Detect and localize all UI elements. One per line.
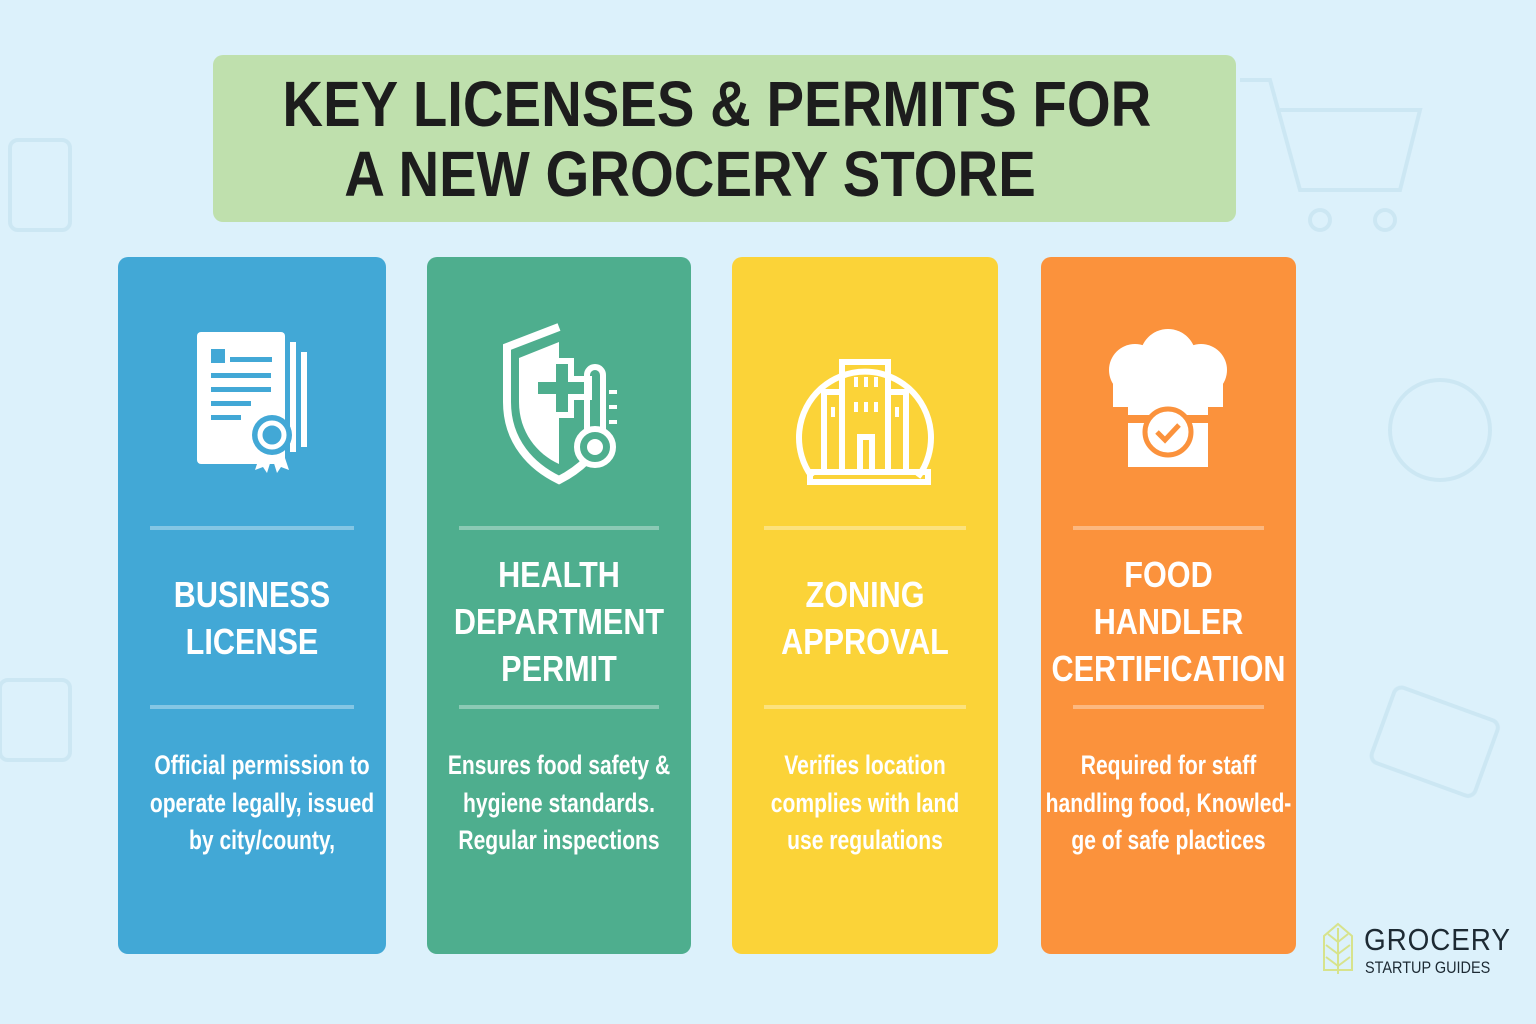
title: KEY LICENSES & PERMITS FOR bbox=[282, 68, 1151, 140]
panel: zoning approval bbox=[732, 257, 998, 954]
text: Ensures food safety & bbox=[448, 750, 670, 780]
panel: health department permit bbox=[427, 257, 691, 954]
text: hygiene standards. bbox=[463, 788, 655, 818]
heading bbox=[454, 554, 664, 689]
heading: BUSINESS bbox=[174, 574, 330, 615]
logo: STARTUP GUIDES bbox=[1365, 958, 1490, 977]
text bbox=[1046, 750, 1291, 855]
text: by city/county, bbox=[189, 825, 335, 855]
text: use regulations bbox=[787, 825, 943, 855]
heading bbox=[174, 574, 330, 662]
heading: LICENSE bbox=[186, 621, 318, 662]
logo bbox=[1323, 922, 1511, 977]
panel: business license bbox=[118, 257, 386, 954]
heading: FOOD bbox=[1124, 554, 1213, 595]
text bbox=[150, 750, 374, 855]
icon: leaf bbox=[1323, 922, 1353, 974]
icon: building in globe bbox=[796, 359, 934, 485]
text bbox=[448, 750, 670, 855]
panel: food handler certification bbox=[1041, 257, 1296, 954]
icon: document with ribbon bbox=[197, 332, 307, 473]
text: ge of safe plactices bbox=[1071, 825, 1266, 855]
heading: PERMIT bbox=[501, 648, 617, 689]
heading: DEPARTMENT bbox=[454, 601, 664, 642]
heading bbox=[1051, 554, 1286, 689]
title: A NEW GROCERY STORE bbox=[344, 138, 1036, 210]
heading: HEALTH bbox=[498, 554, 620, 595]
text: Required for staff bbox=[1081, 750, 1256, 780]
icon: shield and thermometer bbox=[503, 323, 617, 484]
heading: APPROVAL bbox=[781, 621, 949, 662]
icon: chef hat with check bbox=[1109, 329, 1227, 467]
logo: GROCERY bbox=[1364, 922, 1511, 957]
heading: CERTIFICATION bbox=[1051, 648, 1286, 689]
title bbox=[213, 55, 1236, 222]
heading: HANDLER bbox=[1094, 601, 1243, 642]
heading bbox=[781, 574, 949, 662]
text: Verifies location bbox=[784, 750, 946, 780]
text: Official permission to operate legally, issued bbox=[150, 750, 374, 818]
text bbox=[771, 750, 959, 855]
text: Regular inspections bbox=[458, 825, 660, 855]
heading: ZONING bbox=[806, 574, 924, 615]
text: complies with land bbox=[771, 788, 959, 818]
text: handling food, Knowled- bbox=[1046, 788, 1291, 818]
